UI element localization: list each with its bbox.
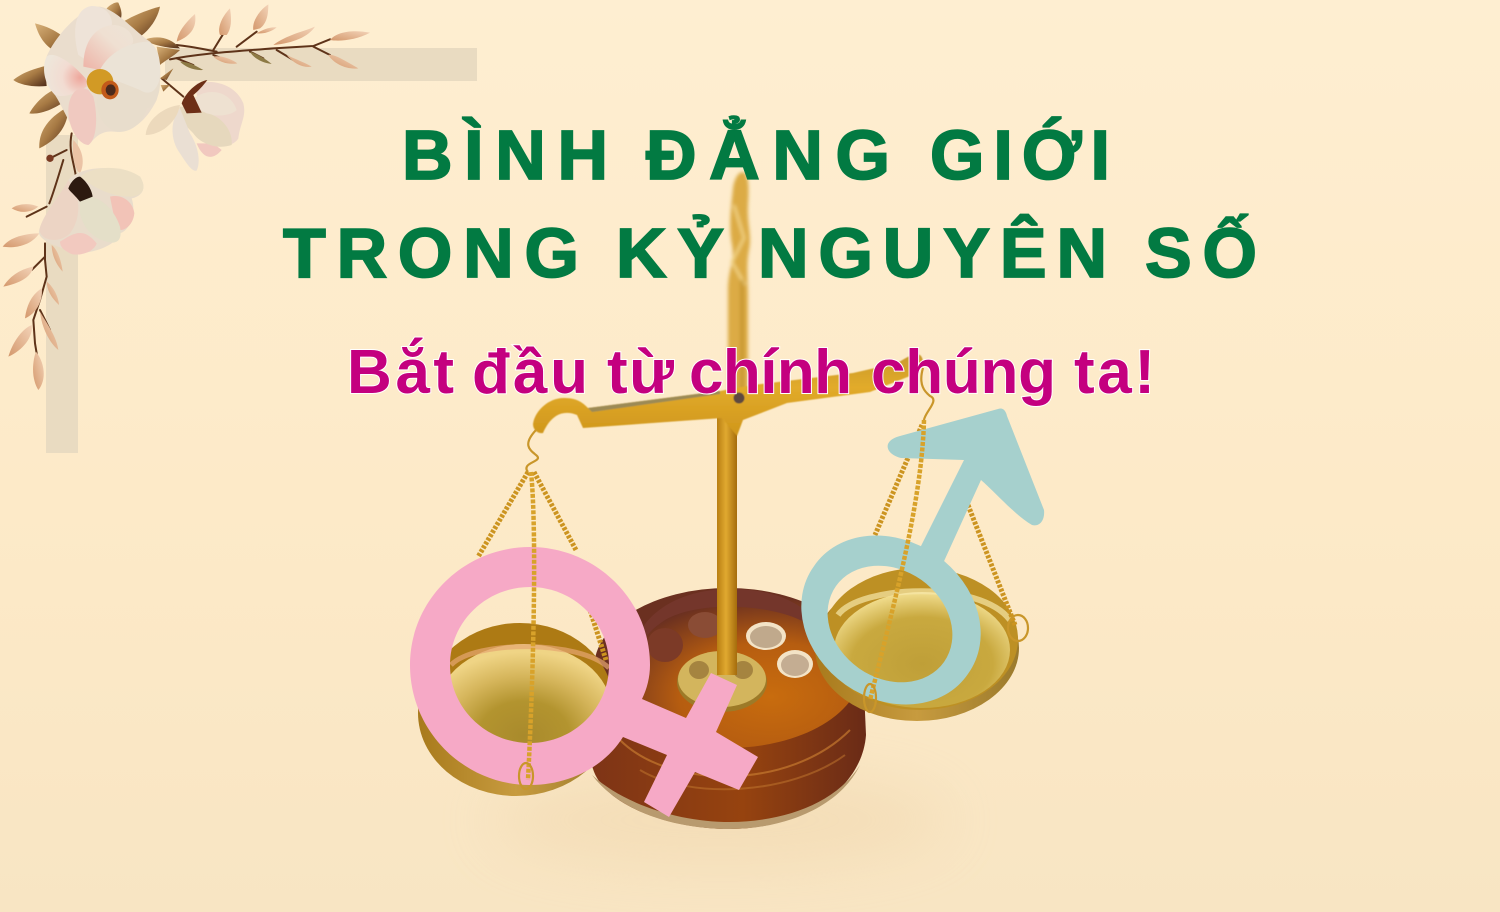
subtitle: từ [607,338,674,407]
title [283,115,1257,292]
subtitle: Bắt [347,338,454,407]
olive leaves [180,52,272,70]
brass foot plate [677,651,767,712]
title line 1: BÌNH [402,116,608,194]
subtitle [347,338,1155,407]
scale column lower [717,412,737,675]
subtitle: chính [689,338,852,407]
wooden base [592,588,866,829]
subtitle: đầu [472,338,588,407]
back chains [478,425,1015,660]
brown leaves [13,2,180,148]
right pan [815,568,1019,721]
corner frame [46,48,477,453]
title line 1 [402,115,1110,194]
title line 1: ĐẲNG [646,115,890,194]
title line 2: SỐ [1145,213,1257,292]
left pan [418,623,614,796]
branches [27,28,330,363]
weight holes [647,612,813,678]
subtitle: ta! [1074,338,1155,407]
scale column upper, out of focus [728,172,750,392]
title line 2 [283,213,1257,292]
front chains [528,420,924,780]
female symbol [410,547,758,817]
title line 2: TRONG [283,214,579,292]
hooks and rings [519,368,1028,789]
flower: large open magnolia [44,6,160,145]
flower: half-open magnolia [146,80,244,171]
title line 2: NGUYÊN [758,213,1107,292]
flower: hanging magnolia [39,140,143,255]
floral corner decoration [3,2,370,390]
scale beam [533,354,923,436]
male symbol [801,408,1044,705]
illustration: balance scale with gender symbols [410,172,1044,829]
title line 1: GIỚI [930,116,1110,194]
subtitle: chúng [871,338,1056,407]
buds and small leaves [3,4,370,390]
title line 2: KỶ [616,214,724,292]
